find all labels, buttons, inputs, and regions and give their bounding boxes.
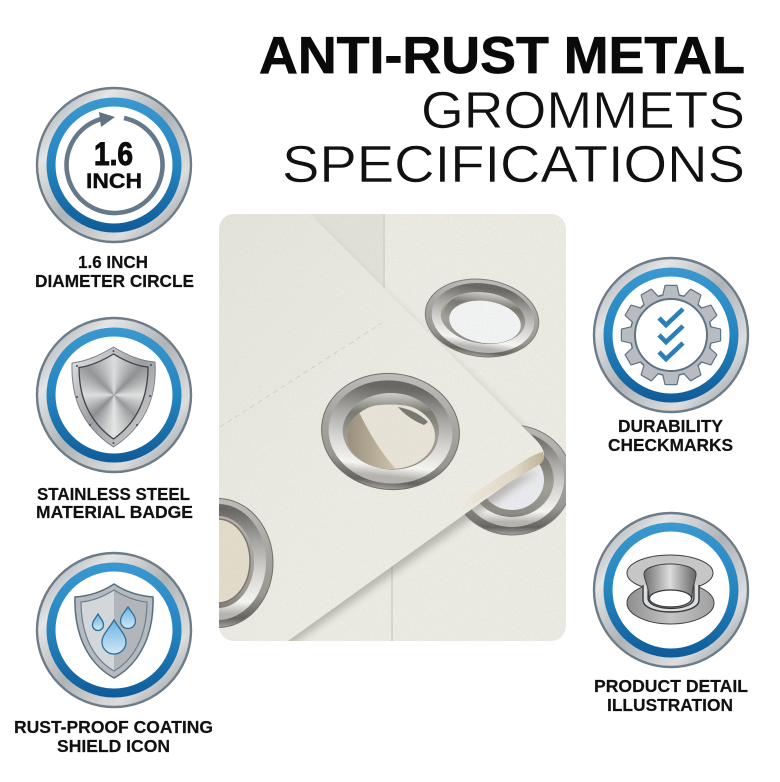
hole (650, 590, 692, 607)
rivets (76, 350, 152, 444)
title: SPECIFICATIONS (282, 136, 745, 194)
icon: shield with water drops (75, 584, 153, 678)
label: rust-proof (14, 717, 213, 756)
icon: grommet cross section (627, 555, 714, 624)
title: GROMMETS (421, 82, 745, 140)
product photo: canvas curtain with metal grommets (219, 214, 566, 641)
water drops (92, 607, 136, 654)
icon: steel shield (72, 347, 156, 447)
value 1.6 inch (86, 136, 142, 193)
upper flange (627, 555, 713, 591)
front folded flap (219, 214, 544, 641)
label: product detail (594, 676, 748, 715)
icon: circular arrow (67, 112, 163, 213)
lower flange (627, 582, 714, 624)
badge: 1.6 inch diameter (37, 88, 191, 242)
center grommet (321, 372, 460, 490)
label: rust-proof: SHIELD ICON (57, 736, 170, 756)
label: stainless steel (36, 484, 193, 522)
back grommet right, under fold (464, 425, 566, 536)
label: durability (608, 416, 733, 455)
value 1.6 inch: 1.6 (94, 136, 133, 172)
title (259, 27, 745, 194)
fold underside (460, 452, 544, 512)
badge: rust-proof shield (37, 553, 191, 707)
section wall (643, 585, 699, 612)
label: stainless steel: STAINLESS STEEL (37, 484, 190, 504)
label: rust-proof: RUST-PROOF COATING (14, 717, 213, 737)
label: diameter (35, 252, 194, 291)
label: stainless steel: MATERIAL BADGE (36, 502, 193, 522)
back grommet top right (424, 278, 540, 358)
icon: three checkmarks (659, 309, 683, 359)
badge: product detail (594, 513, 748, 667)
icon: gear (622, 286, 720, 384)
title: ANTI-RUST METAL (259, 27, 745, 85)
label: product detail: PRODUCT DETAIL (594, 676, 748, 696)
barrel (644, 564, 696, 598)
label: product detail: ILLUSTRATION (607, 695, 733, 715)
label: diameter: DIAMETER CIRCLE (35, 271, 194, 291)
badge: stainless steel shield (37, 318, 191, 472)
label: durability: DURABILITY (618, 416, 723, 436)
label: durability: CHECKMARKS (608, 435, 733, 455)
badge: durability (594, 258, 748, 412)
value 1.6 inch: INCH (86, 170, 142, 193)
label: diameter: 1.6 INCH (78, 252, 148, 272)
left grommet (219, 498, 274, 628)
